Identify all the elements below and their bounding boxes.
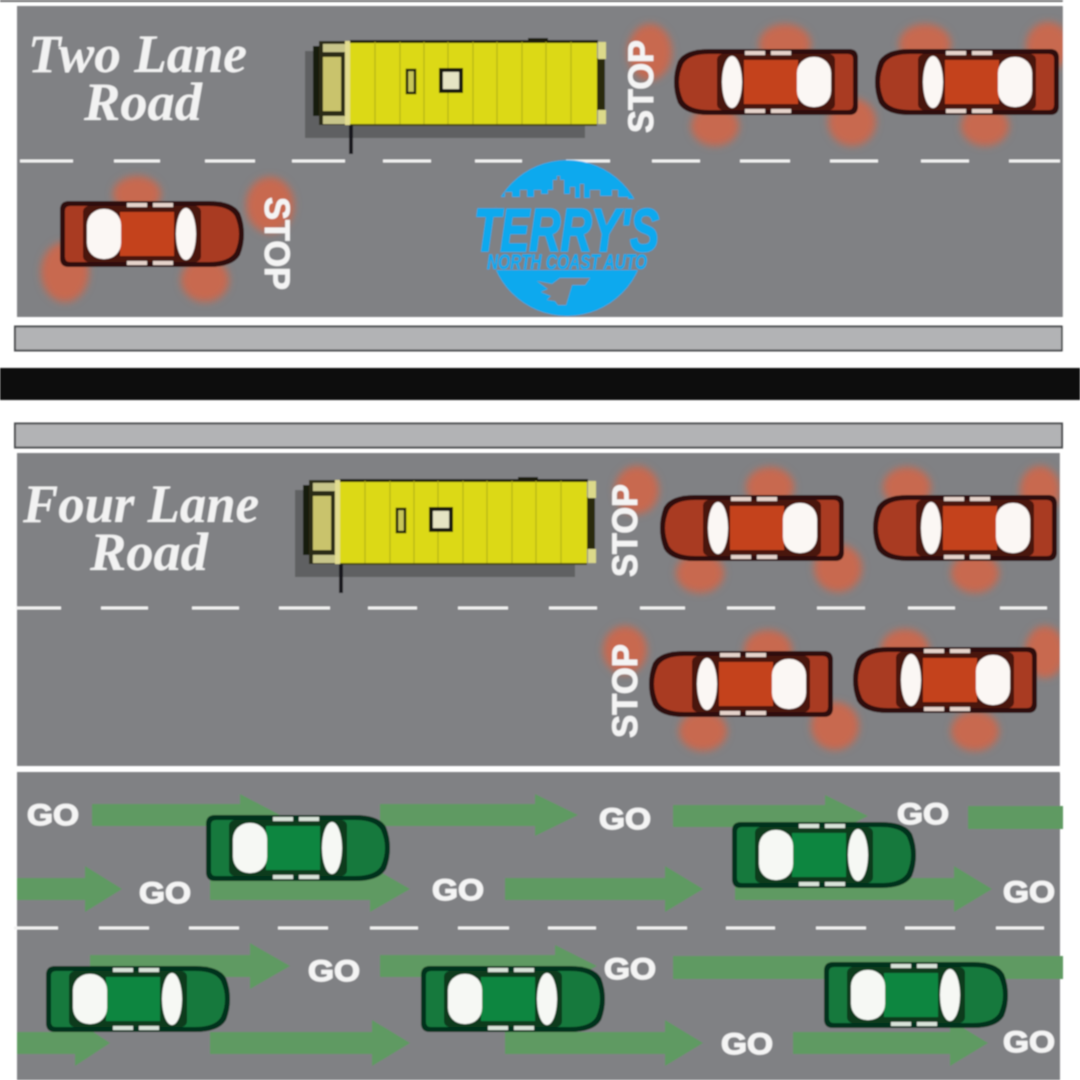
panel: four lane road, stopped traffic	[16, 453, 1065, 766]
go markings: GO	[139, 877, 191, 910]
logo wordmark: TERRY'S	[474, 197, 659, 264]
logo tagline: NORTH COAST AUTO	[487, 251, 647, 274]
moving car: lower lane, right	[824, 962, 1008, 1028]
logo skyline cutout	[488, 176, 646, 270]
go markings: GO	[1003, 876, 1055, 909]
moving car: upper lane, right	[732, 822, 916, 888]
shoulder: four lane road	[15, 424, 1062, 448]
go markings: GO	[1003, 1026, 1055, 1059]
green direction arrows	[17, 794, 1063, 1066]
moving car: upper lane, left	[206, 815, 390, 881]
go markings: GO	[432, 874, 484, 907]
top edge stripe	[0, 0, 1063, 2]
stopped car: upper lane, first	[660, 495, 844, 561]
stopped car: bus lane, second	[875, 49, 1059, 115]
lane divider: two lane road	[20, 160, 1060, 162]
logo flame emblem	[537, 278, 590, 305]
flashing brake lights: four lane road	[603, 466, 1065, 751]
heading: Four Lane Road: Four Lane	[22, 474, 259, 534]
heading: Four Lane Road	[22, 474, 259, 582]
stopped car: lower lane, first	[649, 651, 833, 717]
shoulder: two lane road	[15, 326, 1062, 350]
go markings: GO	[27, 799, 79, 832]
panel: two lane road	[17, 6, 1070, 317]
stopped car: opposite lane	[60, 201, 244, 267]
go markings: GO	[308, 955, 360, 988]
go markings: GO	[604, 953, 656, 986]
go markings	[27, 798, 1055, 1061]
heading: Two Lane Road: Two Lane	[28, 24, 247, 84]
go markings: GO	[599, 803, 651, 836]
school bus: four lane road	[295, 477, 596, 593]
right margin mask: two lane road	[1063, 0, 1080, 360]
stop marking: lower lane: STOP	[606, 644, 645, 738]
stopped car: bus lane, first	[674, 49, 858, 115]
go markings: GO	[897, 798, 949, 831]
flashing brake lights: two lane road	[41, 22, 1070, 302]
panel: divided highway, moving traffic	[14, 772, 1063, 1080]
right margin mask: four lane road	[1060, 453, 1080, 773]
stop marking: upper lane: STOP	[606, 484, 645, 577]
go markings: GO	[721, 1028, 773, 1061]
moving car: lower lane, centre	[421, 966, 605, 1032]
stop marking: bus lane: STOP	[622, 40, 661, 133]
heading: Two Lane Road	[28, 24, 247, 132]
moving car: lower lane, left	[46, 966, 230, 1032]
stop marking: opposite lane: STOP	[257, 197, 296, 290]
black divider band	[0, 368, 1080, 400]
lane divider: divided highway	[14, 926, 1044, 930]
stopped car: lower lane, second	[853, 647, 1037, 713]
heading: Two Lane Road: Road	[83, 72, 203, 132]
stopped car: upper lane, second	[873, 495, 1057, 561]
lane divider: four lane road	[16, 606, 1047, 610]
heading: Four Lane Road: Road	[89, 522, 209, 582]
logo: Terry's North Coast Auto	[474, 160, 659, 316]
school bus: two lane road	[305, 38, 606, 154]
